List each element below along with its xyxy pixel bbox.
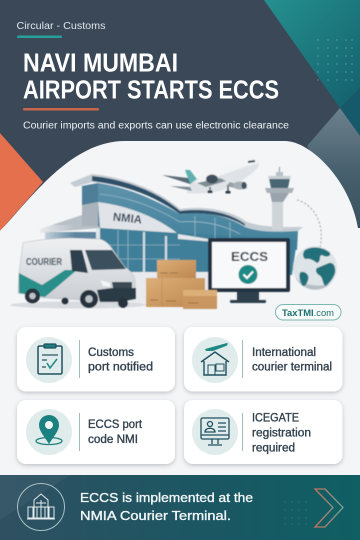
card text: International (252, 347, 316, 359)
engines (206, 174, 218, 184)
grille (112, 282, 132, 288)
footer message: NMIA Courier Terminal. (80, 508, 231, 523)
card: ECCS port code (17, 400, 175, 464)
illustration: terminal building (30, 174, 303, 304)
arrow: chevron (315, 489, 343, 527)
illustration: ECCS monitor (208, 238, 290, 303)
icon: computer profile (201, 418, 229, 445)
teal stripe (19, 270, 77, 297)
white illustration panel (0, 141, 360, 540)
card text: code NMI (88, 434, 138, 446)
brand pill (276, 304, 341, 320)
van label: COURIER (26, 257, 63, 268)
footer message (80, 490, 253, 523)
white transom (178, 234, 240, 244)
card text: ECCS port (88, 419, 143, 431)
card text: port notified (88, 362, 153, 374)
card text (252, 412, 311, 454)
columns (144, 232, 166, 272)
card text: courier terminal (252, 362, 332, 374)
icon: building in circle (18, 484, 64, 530)
card: customs port notified (17, 327, 175, 392)
fuselage (187, 158, 259, 194)
header background (0, 0, 360, 231)
title: NAVI MUMBAI (23, 50, 178, 78)
windshield (85, 250, 126, 270)
near wing (197, 178, 226, 187)
tail fin (185, 170, 199, 186)
title underline (23, 108, 99, 110)
terminal sign: NMIA (112, 212, 142, 227)
title: AIRPORT STARTS ECCS (23, 76, 279, 104)
illustration: globe with dashed route (293, 200, 337, 290)
left fade (30, 225, 75, 247)
far wing (162, 175, 205, 184)
card text: ICEGATE (252, 412, 299, 424)
card text: registration (252, 428, 311, 440)
left wing glass (45, 232, 100, 242)
sign fascia (98, 202, 177, 233)
illustration: airplane (162, 158, 259, 194)
illustration: control tower (265, 167, 294, 230)
card text: Customs (88, 347, 134, 359)
tail plane (170, 186, 192, 191)
main upper glass (98, 183, 298, 250)
category underline (17, 36, 62, 38)
illustration: courier van (10, 238, 146, 308)
landing gear (210, 186, 228, 192)
side window (70, 250, 88, 273)
card text (88, 347, 153, 374)
icon: location pin (36, 415, 62, 444)
illustration: parcel boxes (146, 260, 217, 309)
monitor label: ECCS (231, 249, 268, 264)
category label: Circular - Customs (16, 21, 106, 32)
plaza (100, 272, 210, 304)
wheels (62, 298, 68, 304)
footer banner (0, 475, 360, 540)
card text (252, 347, 332, 374)
card: ICEGATE registration (184, 400, 342, 464)
icon: plane over warehouse (201, 343, 229, 375)
brand pill: TaxTMI.com (282, 308, 334, 319)
footer dots (284, 501, 307, 525)
card text (88, 419, 143, 446)
van body (18, 238, 136, 301)
upper left glass (82, 183, 98, 205)
card: international courier terminal (184, 327, 342, 392)
card text: required (252, 442, 295, 454)
glazing lines (100, 194, 240, 272)
title (23, 50, 279, 104)
dot pattern (317, 39, 353, 81)
roof edge (70, 174, 303, 232)
headlight (100, 280, 110, 287)
canopy (40, 215, 100, 233)
footer message: ECCS is implemented at the (80, 490, 253, 505)
bumper (97, 288, 136, 302)
subtitle: Courier imports and exports can use electronic clearance (23, 120, 289, 132)
cockpit (248, 160, 255, 163)
icon: clipboard checklist (38, 344, 62, 374)
illustration (10, 158, 337, 309)
lower glass (100, 228, 297, 275)
